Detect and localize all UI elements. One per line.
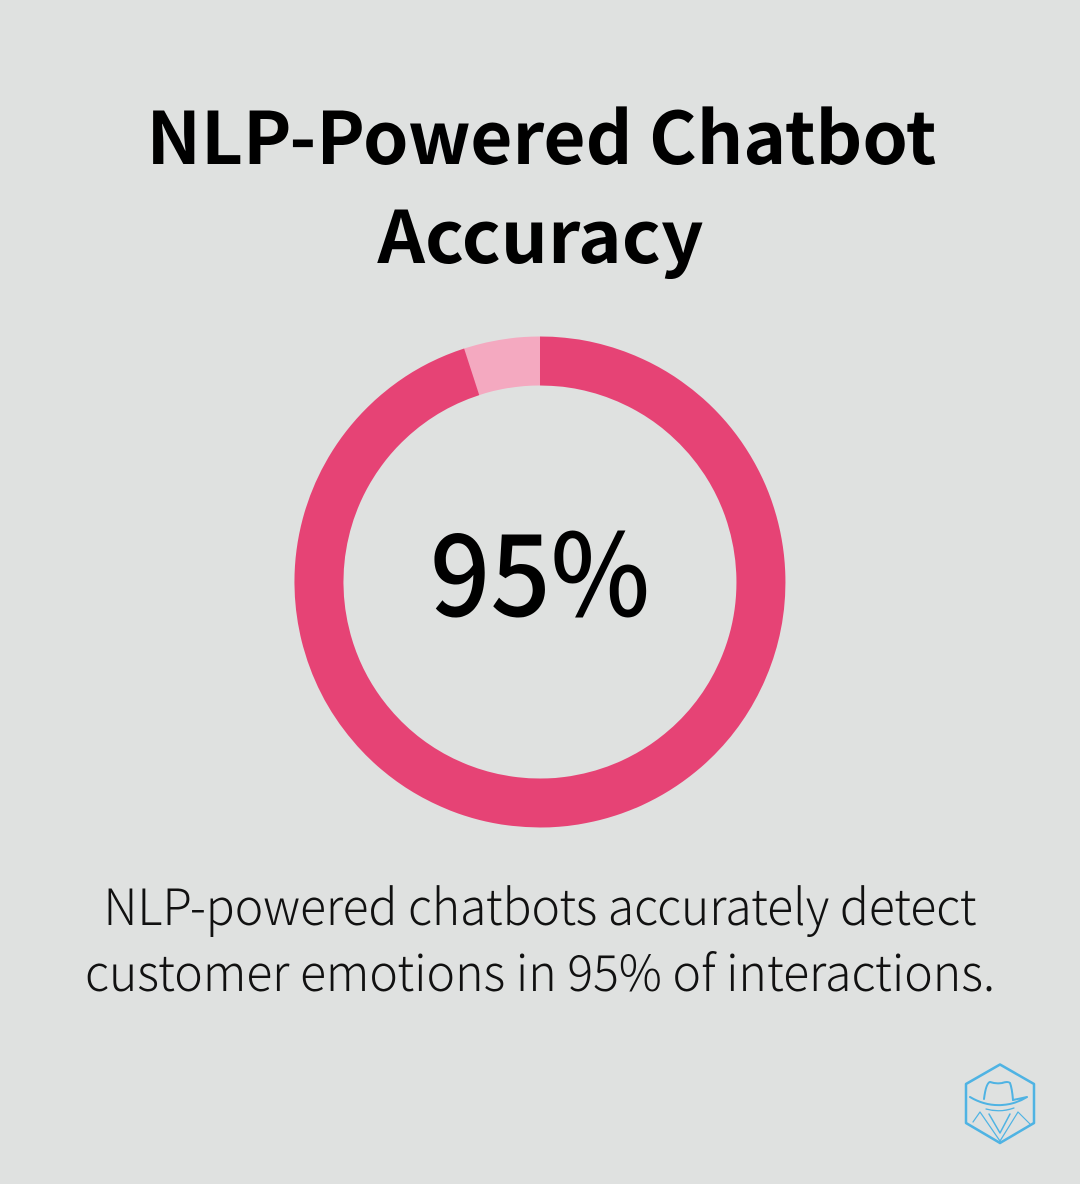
description text bbox=[85, 868, 995, 1006]
title: Accuracy bbox=[376, 179, 704, 284]
title: NLP-Powered Chatbot bbox=[146, 80, 936, 185]
donut chart: 95% bbox=[319, 361, 761, 803]
title bbox=[146, 80, 936, 284]
center value: 95% bbox=[430, 484, 650, 649]
description text: customer emotions in 95% of interactions. bbox=[85, 934, 995, 1006]
donut segment: remaining 5% bbox=[472, 361, 540, 372]
description text: NLP-powered chatbots accurately detect bbox=[104, 868, 976, 940]
donut segment: 95% bbox=[319, 361, 761, 803]
icon: hexagon logo with hat detective bbox=[966, 1064, 1034, 1143]
